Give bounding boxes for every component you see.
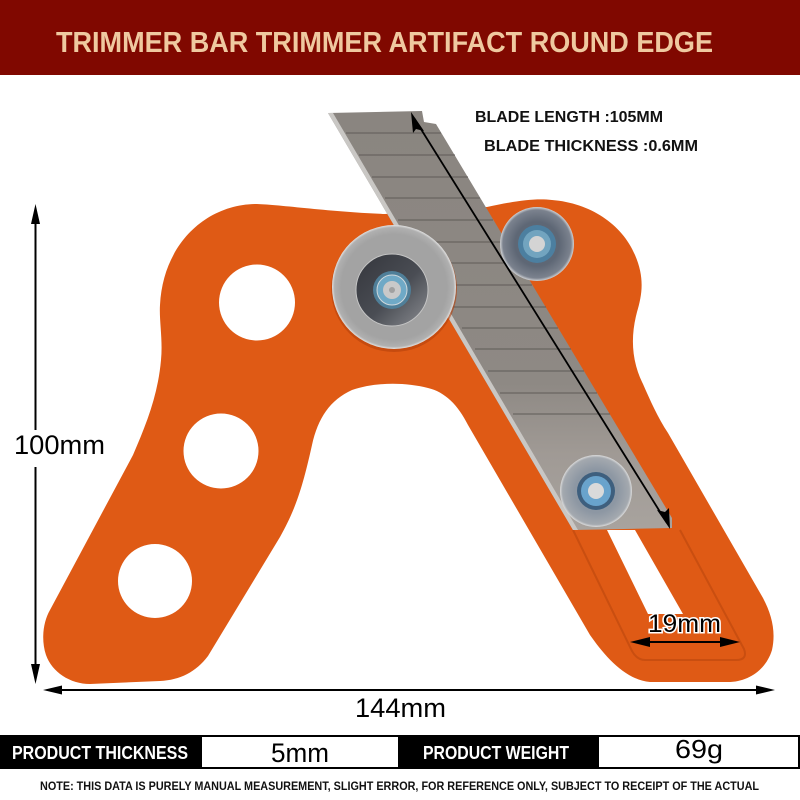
arrow: blade length [411,112,670,529]
lower washer with screw [560,455,632,527]
weight label: PRODUCT WEIGHT [423,742,570,763]
title: TRIMMER BAR TRIMMER ARTIFACT ROUND EDGE [56,27,713,59]
blade sharpened edge [328,113,578,530]
thickness value cell [202,737,398,767]
large washer with screw [331,225,457,352]
blade length label: BLADE LENGTH :105MM [475,109,663,126]
thickness value: 5mm [271,738,329,768]
thickness label: PRODUCT THICKNESS [12,742,188,763]
arrow: height dimension [31,204,40,684]
orange trimmer body [43,199,774,684]
height label: 100mm [14,430,105,460]
blade score lines [346,133,610,414]
arrow: slot width dimension [630,637,740,647]
width label: 144mm [355,693,446,723]
slot recess [573,530,745,660]
weight value cell [599,737,798,767]
blade thickness label: BLADE THICKNESS :0.6MM [484,138,698,155]
utility blade [328,111,672,530]
spec table [0,734,800,769]
arrow: width dimension [43,686,775,694]
slot width label: 19mm [648,610,721,638]
weight value: 69g [675,734,723,764]
small upper washer with screw [500,207,574,281]
header banner [0,0,800,75]
